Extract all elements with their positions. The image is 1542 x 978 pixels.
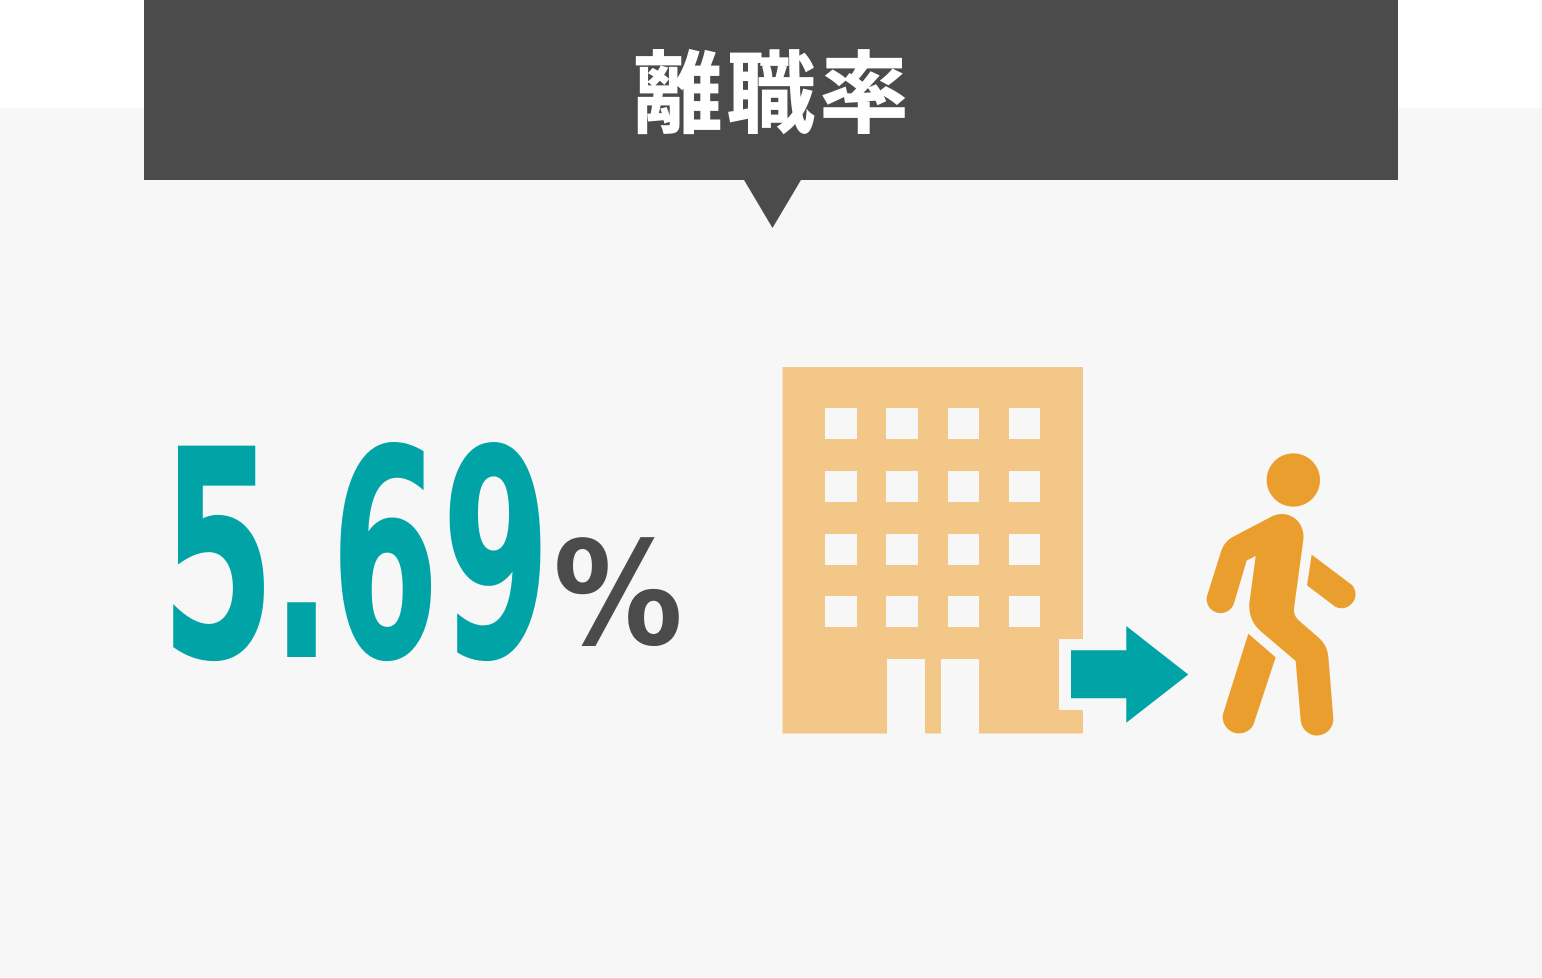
title: 離職率 [634,44,912,144]
rate value 5.69%: . [271,389,332,726]
rate value 5.69%: 6 [331,388,439,725]
icon: office building [782,367,1083,734]
icon: walking person [1207,453,1356,736]
rate value 5.69%: 5 [160,388,276,726]
rate value 5.69%: % [553,512,683,679]
rate value 5.69%: 9 [442,388,550,725]
arrow: leaving the building [1071,626,1188,723]
title banner [144,0,1398,228]
rate value 5.69% [160,388,683,726]
